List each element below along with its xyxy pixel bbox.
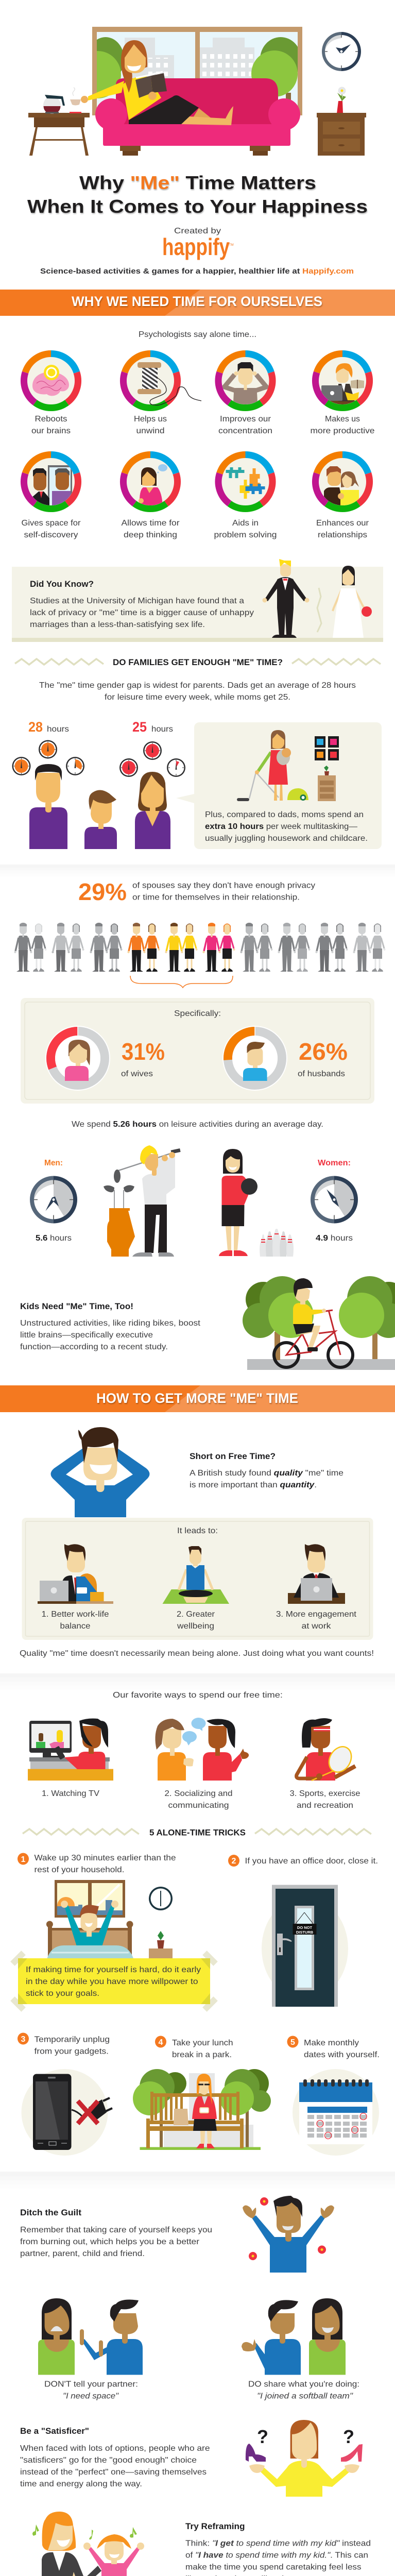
heading: 5 alone-time tricks: 5 ALONE-TIME TRICKS xyxy=(149,1828,246,1837)
body text xyxy=(30,597,254,629)
right shoe xyxy=(341,2444,363,2462)
note: willpower: stick to your goals. xyxy=(26,1989,99,1998)
benefit: relationships: Enhances our xyxy=(316,519,369,528)
title: Why "Me" Time Matters xyxy=(79,172,316,193)
badge: 3 xyxy=(21,2035,26,2044)
stat: 31 percent of wives: of wives xyxy=(121,1070,153,1078)
woman xyxy=(38,2298,75,2375)
badge: 5 xyxy=(290,2038,295,2047)
paragraph: gender gap: The "me" time gender gap is widest for parents. Dads get an average of 28 hours xyxy=(39,681,356,690)
text: short on free time xyxy=(190,1451,344,1489)
illustration: happy man with flowers xyxy=(243,2196,334,2273)
favorite: socializing: communicating xyxy=(168,1801,229,1810)
nightstand with vase and flower xyxy=(317,87,366,156)
man xyxy=(242,2300,301,2375)
pictogram: ten couples xyxy=(14,923,386,972)
icon: brain xyxy=(24,353,78,408)
text: Temporarily unplug xyxy=(34,2035,110,2044)
text: ditch the guilt: partner, parent, child and friend. xyxy=(20,2249,145,2258)
text: short on free time: A British study found quality "me" time xyxy=(190,1469,344,1478)
illustration: unplugged phone xyxy=(22,2069,112,2156)
icon: woman at laptop xyxy=(316,353,369,408)
illustration: door xyxy=(262,1885,348,2007)
text: DON'T tell your partner: xyxy=(44,2380,138,2388)
text: dates with yourself. xyxy=(304,2050,380,2059)
text: favorite ways: Our favorite ways to spend our free time: xyxy=(113,1691,283,1700)
badge: 1 xyxy=(21,1855,26,1864)
text: If you have an office door, close it. xyxy=(245,1857,378,1866)
stat: dad 28 hours: hours xyxy=(47,725,69,734)
text: ditch the guilt: Ditch the Guilt xyxy=(20,2208,81,2217)
illustration: park bench xyxy=(133,2069,271,2150)
trick 4: lunch in park xyxy=(133,2036,271,2150)
text: break in a park. xyxy=(172,2050,232,2059)
benefit: greater wellbeing: 2. Greater xyxy=(177,1610,215,1619)
flowers xyxy=(249,2197,326,2260)
created by: Created by xyxy=(174,227,221,235)
text: from your gadgets. xyxy=(34,2047,109,2056)
text: try reframing: make the time you spend caretaking feel less xyxy=(185,2563,362,2572)
panel: specifically wives and husbands xyxy=(21,998,374,1104)
benefit: reboots our brains: our brains xyxy=(31,427,71,435)
woman smiling xyxy=(309,2298,346,2375)
divider gradient shade xyxy=(0,2172,395,2189)
icon: bowling pins xyxy=(260,1229,294,1257)
benefit: problem solving xyxy=(214,454,277,539)
stat: mom 25 hours xyxy=(132,719,173,735)
women clock stat: Women: xyxy=(318,1159,351,1167)
benefit: relationships xyxy=(316,454,369,539)
text: DO share what you're doing: xyxy=(248,2380,359,2388)
text: Specifically: xyxy=(174,1009,221,1018)
text: be a satisficer xyxy=(20,2426,210,2488)
illustration: bedroom xyxy=(46,1880,173,1958)
benefit: helps us unwind xyxy=(124,353,201,435)
happify logo: TM xyxy=(229,244,234,247)
callout: moms multitasking xyxy=(176,722,382,849)
women clock stat xyxy=(311,1159,358,1243)
text: rest of your household. xyxy=(34,1866,125,1874)
icon: couple embracing xyxy=(316,454,369,509)
trick 3: unplug gadgets xyxy=(18,2033,112,2156)
heading: do families get enough me time: DO FAMILIES GET ENOUGH "ME" TIME? xyxy=(113,657,283,667)
icon: wall frames xyxy=(315,736,339,760)
donut: wives 31 percent xyxy=(45,1026,110,1091)
benefit: helps us unwind: unwind xyxy=(136,427,165,435)
icon: man covering ears xyxy=(218,353,272,408)
body text: lack of privacy or "me" time is a bigger cause of unhappy xyxy=(30,608,254,617)
text: try reframing: of "I have to spend time with my kid." . This can xyxy=(185,2551,368,2560)
text: ditch the guilt: Remember that taking care of yourself keeps you xyxy=(20,2226,212,2234)
nightstand xyxy=(149,1931,173,1958)
benefit: reboots our brains xyxy=(24,353,78,435)
text xyxy=(34,2035,110,2056)
stat: mom 25 hours: 25 xyxy=(132,719,147,735)
benefit: relationships: relationships xyxy=(318,531,367,539)
panel: don't tell your partner xyxy=(38,2298,143,2401)
text: ditch the guilt xyxy=(20,2208,212,2258)
benefit: self-discovery: self-discovery xyxy=(24,531,78,539)
text: kids need me time: little brains—specifically executive xyxy=(20,1331,153,1340)
benefit: engagement at work: at work xyxy=(302,1622,332,1631)
clock xyxy=(149,1887,173,1910)
text: be a satisficer: Be a "Satisficer" xyxy=(20,2426,89,2436)
badge xyxy=(18,1853,29,1865)
text: be a satisficer: "satisficers" go for the "good enough" choice xyxy=(20,2456,197,2465)
family figures xyxy=(29,764,170,849)
stat: 29 percent of spouses: of spouses say they don't have enough privacy xyxy=(132,881,315,890)
benefit: improves concentration: concentration xyxy=(218,427,272,435)
illustration: kid riding bike xyxy=(243,1276,395,1370)
favorite: watching tv: 1. Watching TV xyxy=(42,1789,99,1798)
favorite: socializing: 2. Socializing and xyxy=(165,1789,233,1798)
note: willpower: If making time for yourself is hard, do it early xyxy=(26,1965,201,1974)
text: be a satisficer: instead of the "perfect" one—saving themselves xyxy=(20,2468,207,2477)
badge xyxy=(18,2033,29,2044)
favorite: sports xyxy=(289,1718,360,1810)
icons: mom timers xyxy=(119,741,185,777)
text: Wake up 30 minutes earlier than the xyxy=(34,1854,176,1862)
illustration: woman choosing shoes xyxy=(246,2420,363,2497)
icon: man at mirror xyxy=(24,454,78,509)
title: When It Comes to Your Happiness xyxy=(27,196,368,217)
text: quality me time: Quality "me" time doesn't necessarily mean being alone. Just doing what you want counts! xyxy=(20,1649,374,1658)
women clock stat: 4.9 hours xyxy=(316,1234,353,1243)
text: "I need space" xyxy=(63,2392,119,2401)
benefit: reboots our brains: Reboots xyxy=(35,415,67,423)
mom xyxy=(135,772,170,849)
benefit: greater wellbeing: wellbeing xyxy=(177,1622,214,1631)
man with raised hand xyxy=(80,2300,143,2375)
text: "I joined a softball team" xyxy=(257,2392,353,2401)
left shoe xyxy=(246,2444,266,2462)
stat: 29 percent of spouses xyxy=(78,878,315,905)
donut: husbands 26 percent xyxy=(222,1026,287,1091)
stat: dad 28 hours xyxy=(28,719,69,735)
text: Take your lunch xyxy=(172,2039,233,2047)
favorite: sports: and recreation xyxy=(297,1801,353,1810)
men clock stat xyxy=(30,1159,77,1243)
text: be a satisficer: When faced with lots of options, people who are xyxy=(20,2444,210,2453)
wall clock xyxy=(322,32,361,71)
badge xyxy=(228,1855,239,1867)
icon: bowler xyxy=(219,1149,257,1256)
text: be a satisficer: time and energy along the way. xyxy=(20,2480,142,2488)
trick 5: monthly dates xyxy=(287,2036,380,2156)
question marks xyxy=(257,2426,354,2447)
heading: 5 alone-time tricks xyxy=(23,1828,371,1837)
body text: Studies at the University of Michigan have found that a xyxy=(30,597,244,605)
benefit: more productive xyxy=(310,353,375,435)
benefit: improves concentration xyxy=(218,353,272,435)
stat: dad 28 hours: 28 xyxy=(28,719,43,735)
benefit: more productive: more productive xyxy=(310,427,375,435)
text: 5.26 hours: We spend 5.26 hours on leisure activities during an average day. xyxy=(72,1120,323,1129)
divider gradient shade xyxy=(0,1673,395,1689)
note: willpower: in the day while you have more willpower to xyxy=(26,1977,198,1986)
text xyxy=(248,2380,359,2401)
music notes xyxy=(32,2524,137,2539)
question marks: ? xyxy=(257,2426,268,2447)
text: Make monthly xyxy=(304,2039,359,2047)
illustration: man relaxing hands behind head xyxy=(50,1427,149,1517)
icon: dresser with plant xyxy=(318,766,336,801)
benefit: work-life balance: balance xyxy=(60,1622,91,1631)
benefit: improves concentration: Improves our xyxy=(220,415,271,423)
trick 1: wake up earlier xyxy=(10,1853,218,2012)
text: try reframing xyxy=(185,2521,371,2576)
body text: marriages than a less-than-satisfying sex life. xyxy=(30,620,205,629)
stat: 31 percent of wives: 31% xyxy=(122,1038,165,1065)
men clock stat: 5.6 hours xyxy=(36,1234,72,1243)
paragraph: gender gap: for leisure time every week, while moms get 25. xyxy=(105,693,290,702)
trick 2: close office door xyxy=(228,1855,378,2007)
badge xyxy=(155,2036,166,2047)
badge: 4 xyxy=(159,2038,163,2047)
note: willpower xyxy=(10,1951,218,2012)
divider gradient shade xyxy=(0,865,395,876)
section band: how to get more me time xyxy=(0,1385,395,1412)
heading: do families get enough me time xyxy=(15,657,381,667)
benefit: work-life balance: 1. Better work-life xyxy=(41,1610,109,1619)
heading: Did You Know? xyxy=(30,579,94,589)
text: ditch the guilt: from burning out, which helps you be a better xyxy=(20,2238,200,2246)
panel: did you know xyxy=(12,559,383,642)
section band: how to get more me time: HOW TO GET MORE "ME" TIME xyxy=(96,1391,298,1406)
panel: it leads to xyxy=(22,1518,373,1640)
dad xyxy=(29,764,67,849)
benefit: helps us unwind: Helps us xyxy=(134,415,167,423)
panel: do share what you're doing xyxy=(242,2298,359,2401)
question marks: ? xyxy=(343,2426,354,2447)
stat: 26 percent of husbands: 26% xyxy=(299,1038,348,1065)
crack between couple xyxy=(317,588,321,632)
benefit: self-discovery xyxy=(22,454,81,539)
men clock stat: Men: xyxy=(44,1159,63,1167)
icon: clock xyxy=(30,1176,77,1223)
illustration: calendar xyxy=(293,2069,379,2156)
badge: 2 xyxy=(232,1857,236,1866)
icon: mom with vacuum and baby xyxy=(237,730,308,801)
child xyxy=(84,790,117,849)
stat: 29 percent of spouses: 29% xyxy=(78,878,127,905)
stat: 29 percent of spouses: or time for themselves in their relationship. xyxy=(132,893,300,902)
text: try reframing: Think: "I get to spend time with my kid" instead xyxy=(185,2539,371,2548)
illustration: mother and daughter singing xyxy=(32,2512,144,2576)
section band: why we need time xyxy=(0,290,395,316)
text xyxy=(34,1854,176,1874)
text: try reframing: Try Reframing xyxy=(185,2521,245,2531)
illustration: door: DO NOT xyxy=(297,1925,312,1930)
paragraph: gender gap xyxy=(39,681,356,702)
tagline: Science-based activities & games for a happier, healthier life at Happify.com xyxy=(40,267,354,276)
badge xyxy=(287,2036,299,2047)
icon: bride xyxy=(333,566,372,638)
benefit: engagement at work xyxy=(276,1544,357,1631)
sofa xyxy=(95,78,300,156)
coffee table with pot and cup xyxy=(28,88,90,156)
text: extra 10 hours per week multitasking— xyxy=(205,822,357,831)
intro text: Psychologists say alone time... xyxy=(139,330,256,339)
hero illustration: woman on sofa xyxy=(28,27,366,156)
text: kids need me time: Unstructured activities, like riding bikes, boost xyxy=(20,1319,201,1328)
text xyxy=(172,2039,233,2059)
benefit: deep thinking xyxy=(122,454,180,539)
text xyxy=(44,2380,138,2401)
panel: it leads to: It leads to: xyxy=(177,1527,218,1535)
text: kids need me time: function—according to a recent study. xyxy=(20,1343,168,1351)
title xyxy=(27,172,368,217)
text: usually juggling housework and childcare. xyxy=(205,834,368,843)
benefit: work-life balance xyxy=(38,1544,113,1631)
illustration: door: DISTURB xyxy=(296,1930,314,1935)
benefit: engagement at work: 3. More engagement xyxy=(276,1610,357,1619)
window with city and trees xyxy=(75,27,302,115)
text xyxy=(304,2039,380,2059)
icon: golfer xyxy=(104,1145,181,1257)
text: Plus, compared to dads, moms spend an xyxy=(205,810,364,819)
text xyxy=(205,810,368,843)
benefit: problem solving: Aids in xyxy=(232,519,259,528)
icon: puzzle pieces xyxy=(218,454,272,509)
stat: 26 percent of husbands: of husbands xyxy=(298,1070,345,1078)
benefit: deep thinking: Allows time for xyxy=(122,519,180,528)
benefit: problem solving: problem solving xyxy=(214,531,277,539)
stat: mom 25 hours: hours xyxy=(151,725,173,734)
brace xyxy=(130,976,233,988)
favorite: socializing xyxy=(155,1718,249,1810)
benefit: greater wellbeing xyxy=(163,1546,229,1631)
icons: dad timers xyxy=(12,740,84,775)
favorite: sports: 3. Sports, exercise xyxy=(289,1789,360,1798)
icon: clock xyxy=(311,1176,358,1223)
benefit: more productive: Makes us xyxy=(325,415,360,423)
favorite: watching tv xyxy=(28,1719,113,1798)
text: short on free time: is more important than quantity . xyxy=(190,1481,317,1489)
happify logo: happify xyxy=(162,233,230,260)
icon: thread spool xyxy=(124,353,201,408)
stat: 26 percent of husbands xyxy=(298,1038,348,1078)
woman reading xyxy=(81,40,233,125)
benefit: deep thinking: deep thinking xyxy=(124,531,177,539)
icon: groom xyxy=(263,559,309,638)
text: kids need me time xyxy=(20,1301,201,1351)
section band: why we need time: WHY WE NEED TIME FOR OURSELVES xyxy=(72,294,322,309)
stat: 31 percent of wives xyxy=(121,1038,165,1078)
benefit: self-discovery: Gives space for xyxy=(22,519,81,528)
icon: thinking woman xyxy=(124,454,177,509)
text: kids need me time: Kids Need "Me" Time, Too! xyxy=(20,1301,133,1311)
text: short on free time: Short on Free Time? xyxy=(190,1451,276,1461)
